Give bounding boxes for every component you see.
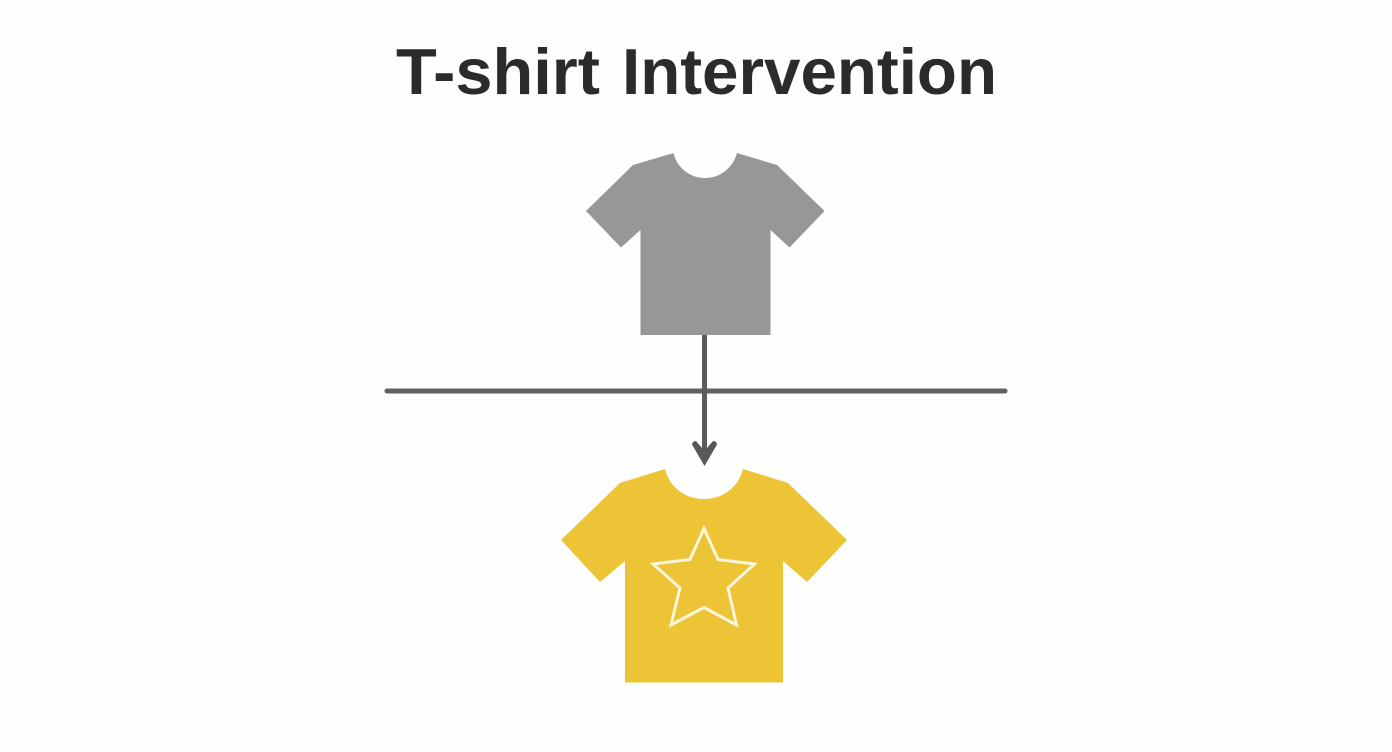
title	[396, 35, 997, 108]
arrow: down from grey shirt to yellow shirt	[692, 335, 717, 466]
icon: grey t-shirt (before)	[586, 153, 824, 335]
icon: yellow t-shirt with star (after)	[561, 469, 847, 682]
title: Intervention	[622, 35, 997, 108]
title: T-shirt	[396, 35, 600, 108]
icon: star outline	[653, 528, 754, 625]
divider line	[387, 388, 1005, 394]
